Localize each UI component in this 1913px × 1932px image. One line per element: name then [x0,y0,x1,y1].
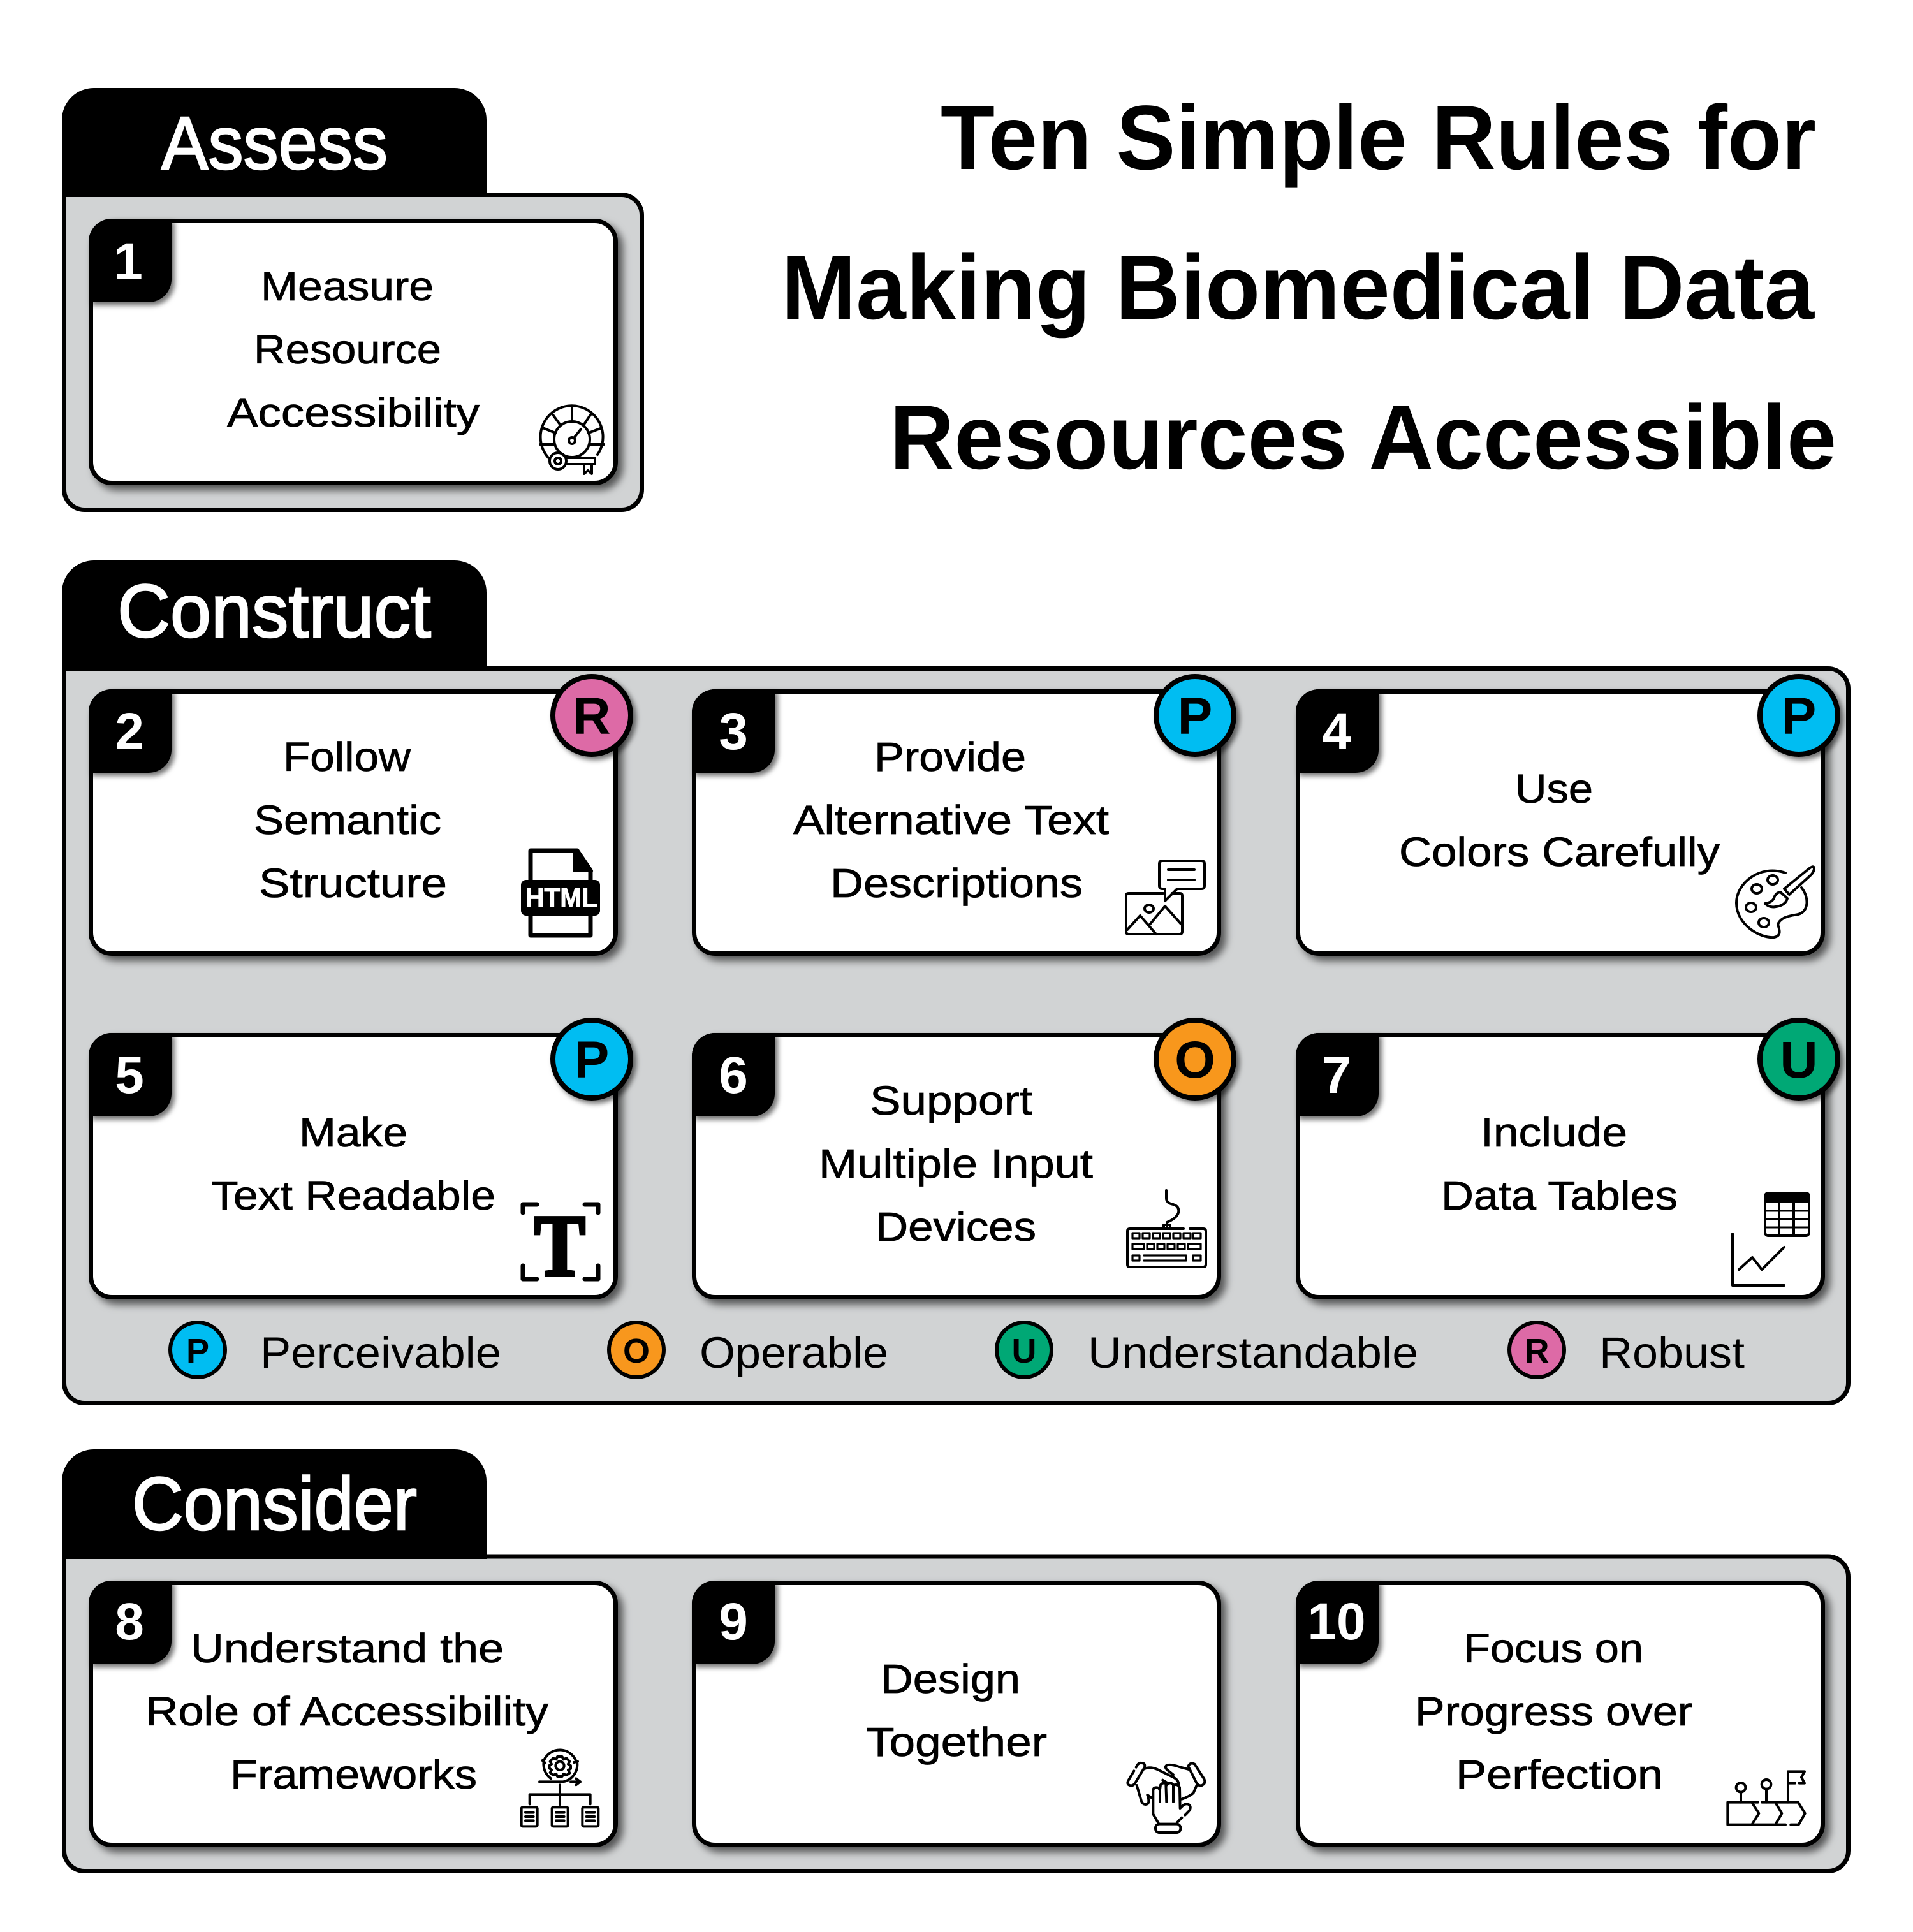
card 8: 8 [115,1593,144,1651]
icon: framework hierarchy [522,1750,598,1826]
legend [170,1322,1745,1377]
heading: Consider [62,1449,487,1559]
card 6: Support [870,1078,1032,1123]
title: Making Biomedical Data [781,237,1815,339]
panel: Consider [62,1449,1848,1871]
card 3: 3 [719,703,748,761]
card 4: Use [1515,766,1593,812]
heading: Construct [62,560,487,671]
card 3: Descriptions [830,860,1083,906]
badge: P [1760,677,1838,754]
card 10 [1296,1581,1822,1845]
badge: P: P [1782,687,1816,745]
badge: U [1760,1020,1838,1098]
card 8: Role of Accessibility [145,1688,548,1734]
card 10: Focus on [1463,1625,1643,1671]
heading: Assess: Assess [161,101,388,186]
legend: Perceivable: Perceivable [260,1328,501,1377]
icon: HTML file [521,851,600,935]
badge: O [1156,1020,1234,1098]
title [781,87,1836,488]
icon: text frame T: T [534,1197,585,1294]
legend: Understandable [997,1322,1418,1377]
icon: keyboard [1127,1190,1206,1267]
card 6: Devices [876,1204,1036,1250]
card 8: Understand the [191,1625,504,1671]
card 6 [692,1020,1234,1297]
card 3 [692,677,1234,954]
icon: milestones with flag [1727,1771,1805,1825]
legend: Robust: R [1524,1332,1550,1370]
card 2: Semantic [254,797,441,843]
card 4 [1296,677,1838,954]
card 5: Make [299,1109,407,1155]
title: Resources Accessible [890,387,1836,488]
icon: palette and brush [1736,867,1814,937]
card 5: 5 [115,1046,144,1104]
badge: P [1156,677,1234,754]
card 2: 2 [115,703,144,761]
card 4: 4 [1322,703,1351,761]
card 7 [1296,1020,1838,1297]
icon: table and line chart [1733,1193,1809,1285]
badge: R: R [573,687,611,745]
card 10: Perfection [1456,1752,1663,1797]
card 9 [692,1581,1219,1845]
heading: Assess [62,88,487,197]
card 7: 7 [1322,1046,1351,1104]
badge: U: U [1780,1031,1818,1089]
badge: P: P [1178,687,1212,745]
card 10: 10 [1307,1593,1366,1651]
card 4: Colors Carefully [1399,829,1720,875]
legend: Robust [1509,1322,1745,1377]
legend: Operable: O [623,1332,650,1370]
legend: Robust: Robust [1599,1328,1745,1377]
card 3: Alternative Text [793,797,1109,843]
card 2: Follow [283,734,411,780]
card 5: Text Readable [211,1173,495,1218]
card 5 [89,1020,631,1297]
card 2: Structure [259,860,447,906]
heading: Consider: Consider [132,1462,417,1546]
icon: image with speech bubble [1126,861,1205,934]
legend: Operable [609,1322,888,1377]
badge: P [553,1020,631,1098]
legend: Perceivable: P [186,1332,209,1370]
icon: hands together [1127,1763,1205,1833]
badge: O: O [1175,1031,1215,1089]
card 9: 9 [719,1593,748,1651]
card 7: Include [1481,1109,1627,1155]
badge: P: P [575,1031,609,1089]
card 1: Measure [261,263,434,309]
card 2 [89,677,631,954]
card 1: Accessibility [227,390,480,435]
panel: Construct [62,560,1848,1403]
card 8 [89,1581,616,1845]
icon: gauge with key [540,406,604,474]
card 9: Design [881,1656,1020,1702]
card 8: Frameworks [230,1752,477,1797]
card 1: Resource [254,326,441,372]
badge: R [553,677,631,754]
panel: Assess [62,88,641,510]
icon: HTML file: HTML [525,882,597,912]
card 3: Provide [874,734,1026,780]
card 1: 1 [114,233,143,291]
legend: Operable: Operable [700,1328,888,1377]
card 10: Progress over [1415,1688,1692,1734]
card 9: Together [866,1719,1047,1765]
legend: Understandable: Understandable [1088,1328,1418,1377]
legend: Perceivable [170,1322,501,1377]
heading: Construct: Construct [117,569,431,654]
legend: Understandable: U [1011,1332,1037,1370]
card 1 [89,219,616,483]
card 6: 6 [719,1046,748,1104]
title: Ten Simple Rules for [941,87,1816,189]
card 7: Data Tables [1441,1173,1678,1218]
card 6: Multiple Input [819,1141,1093,1187]
